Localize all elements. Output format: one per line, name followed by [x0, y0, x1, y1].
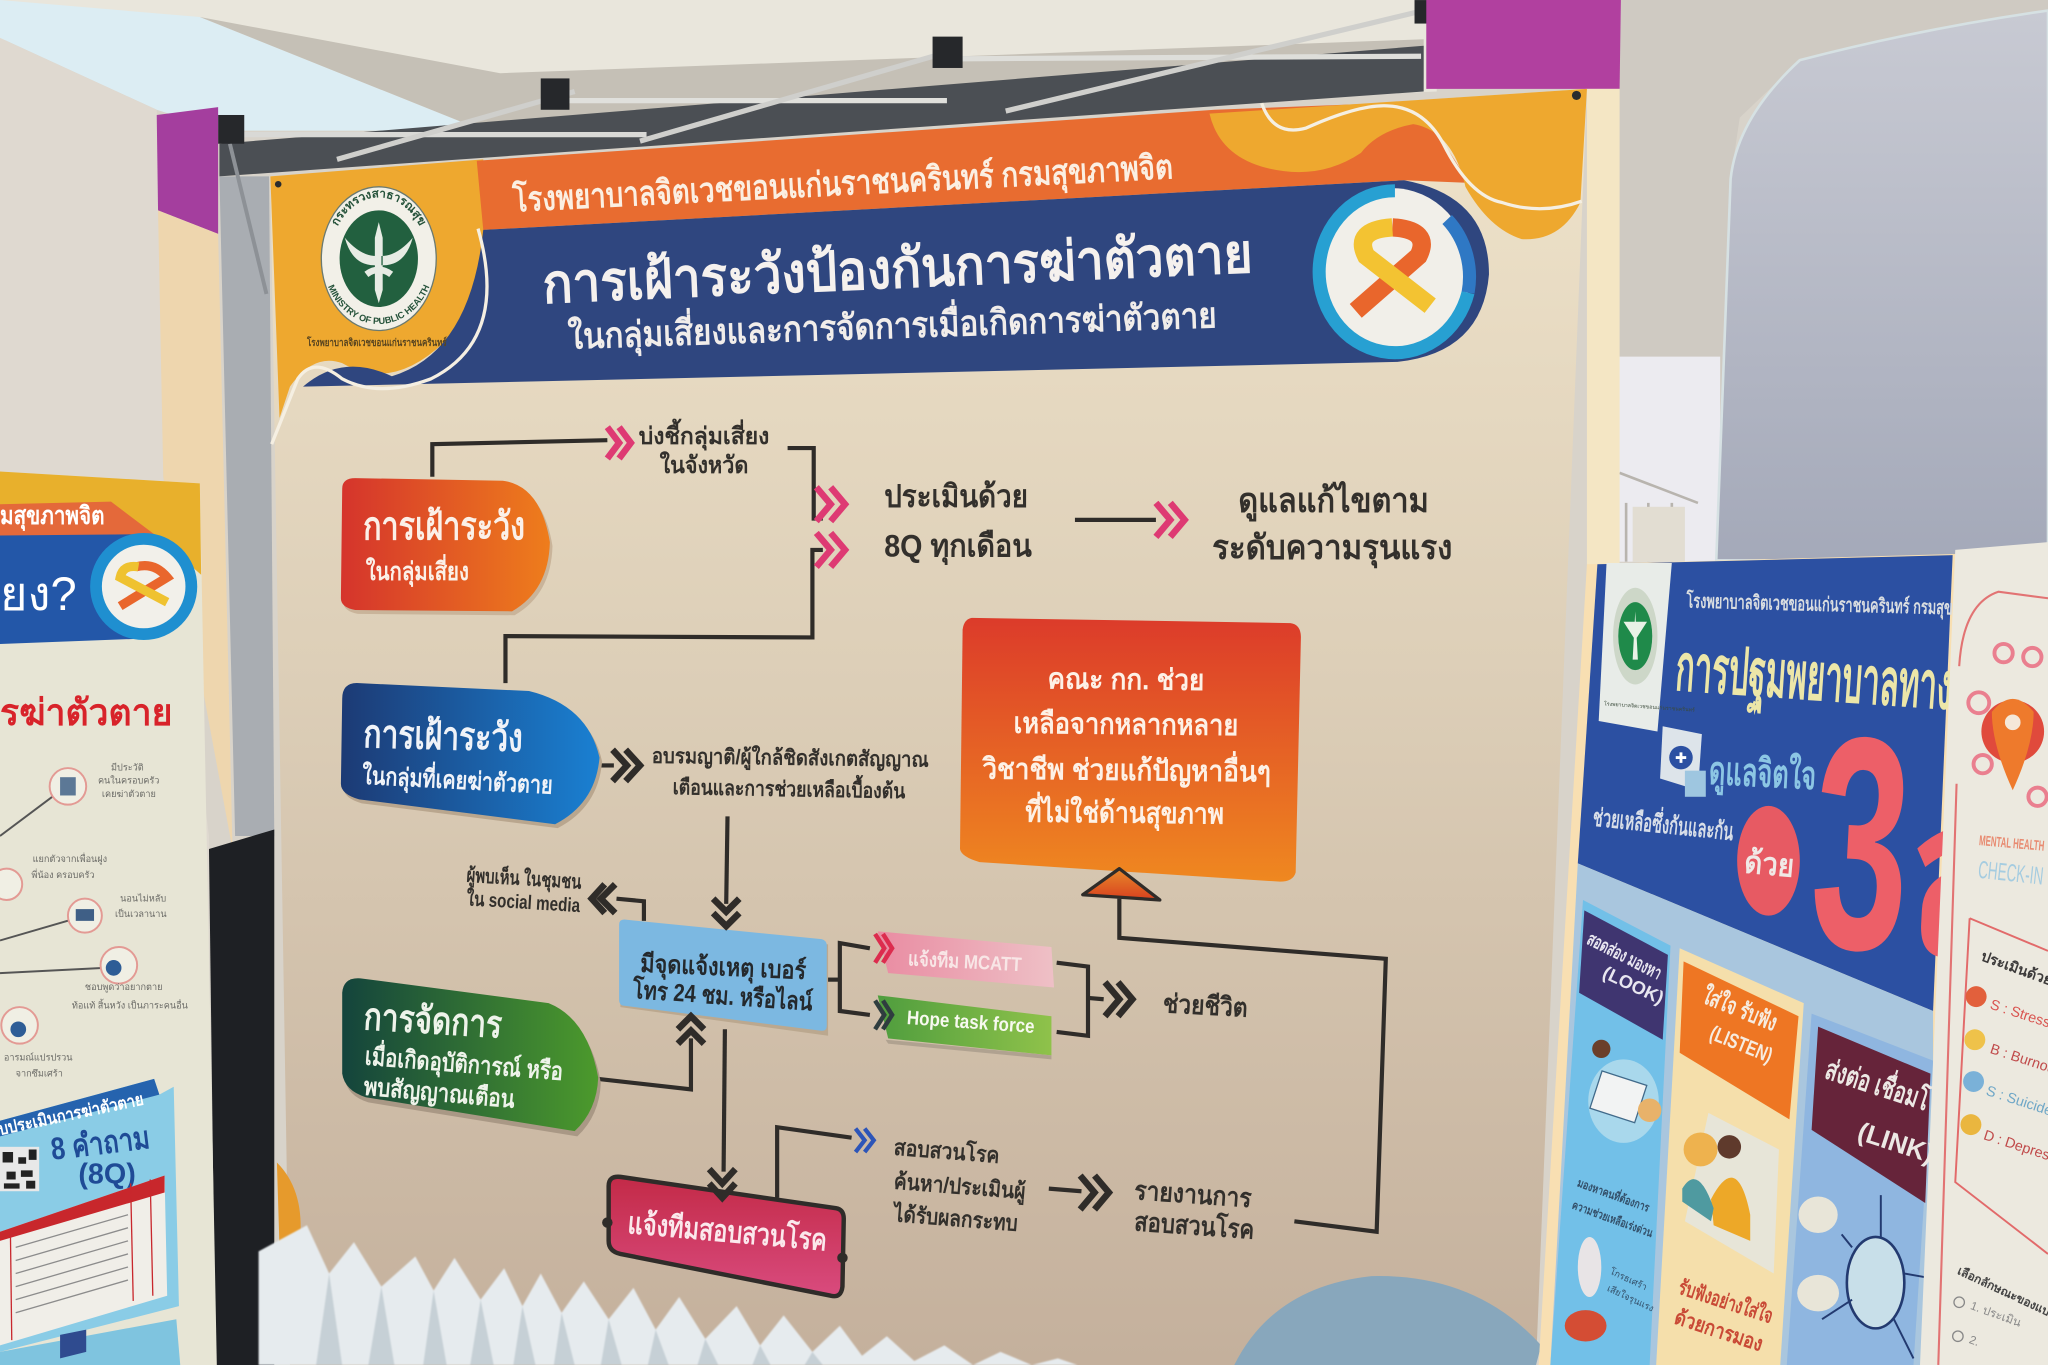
left poster ribbon badge: [90, 533, 197, 640]
left poster: ยง?: [0, 567, 77, 620]
text: investigate steps: สอบสวนโรค: [893, 1134, 1001, 1168]
arrow: pink to severity care: [1156, 503, 1185, 537]
text: care by severity: ดูแลแก้ไขตาม: [1238, 481, 1429, 522]
box: notify investigation team: แจ้งทีมสอบสวนโรค: [626, 1204, 829, 1257]
column: listen: รับฟังอย่างใส่ใจ: [1676, 1274, 1776, 1328]
arrow: mcatt: [875, 934, 892, 963]
text: community witnesses: ใน social media: [466, 887, 582, 917]
flowchart labels: [466, 418, 1452, 1245]
box: surveillance prior attempt: [341, 683, 602, 828]
box: management on incident: [342, 978, 601, 1136]
text: assess with 8Q: 8Q ทุกเดือน: [884, 528, 1032, 565]
text: investigation report: [1133, 1175, 1255, 1245]
check-in red frame: [1938, 592, 2048, 1365]
arrow: dark to training: [613, 750, 640, 781]
frame and truss: [218, 0, 1430, 836]
text: identify risk group: ในจังหวัด: [660, 451, 748, 478]
box: hotline: โทร 24 ชม. หรือไลน์: [631, 974, 814, 1017]
column: listen: [1656, 948, 1804, 1365]
icon: ministry of public health seal: กระทรวงสาธารณสุข: [332, 190, 426, 226]
box: hotline: มีจุดแจ้งเหตุ เบอร์: [640, 949, 807, 987]
left poster small captions: นอนไม่หลับ: [120, 893, 166, 903]
text: training relatives: เตือนและการช่วยเหลือเบื้องต้น: [673, 771, 906, 803]
magenta and cream side panels: [157, 0, 1621, 1365]
column: look: มองหาคนที่ต้องการ: [1575, 1174, 1653, 1215]
text: care by severity: ระดับความรุนแรง: [1212, 529, 1452, 569]
column: look: [1550, 900, 1671, 1365]
box: management on incident: พบสัญญาณเตือน: [363, 1073, 516, 1114]
arrow: to report: [1080, 1176, 1109, 1210]
box: surveillance risk group: การเฝ้าระวัง: [363, 505, 525, 548]
right poster: [1539, 554, 2048, 1365]
icon: ministry of public health seal: MINISTRY OF PUBLIC HEALTH: [328, 284, 430, 324]
box: surveillance prior attempt: การเฝ้าระวัง: [363, 713, 523, 760]
text: training relatives: อบรมญาติ/ผู้ใกล้ชิดสังเกตสัญญาณ: [652, 743, 929, 774]
left poster small captions: คนในครอบครัว: [98, 776, 159, 786]
text: save lives: ช่วยชีวิต: [1162, 988, 1248, 1023]
right poster first-aid icon: [1660, 726, 1706, 797]
box: committee help: วิชาชีพ ช่วยแก้ปัญหาอื่นๆ: [981, 747, 1271, 790]
arrow: pink into 8Q lower: [816, 533, 845, 567]
left poster small captions: อารมณ์แปรปรวน: [4, 1052, 73, 1063]
text: assess with 8Q: [884, 479, 1032, 565]
column: look: สอดส่อง มองหา: [1584, 928, 1666, 983]
box: committee help: ที่ไม่ใช่ด้านสุขภาพ: [1025, 791, 1224, 832]
column: link: (LINK): [1854, 1116, 1938, 1169]
header yellow left block: [270, 159, 487, 418]
column: link: [1787, 1014, 1938, 1365]
banner lower-left yellow remnant: [277, 1162, 301, 1247]
box: management on incident: การจัดการ: [363, 996, 504, 1047]
right poster big letter: ส: [1901, 751, 2048, 1006]
header navy band: [303, 180, 1489, 387]
left poster small captions: ท้อแท้ สิ้นหวัง เป็นภาระคนอื่น: [72, 997, 188, 1010]
text: investigate steps: [890, 1134, 1026, 1236]
text: identify risk group: [639, 418, 769, 478]
banner header: [270, 88, 1587, 444]
left poster small captions: แยกตัวจากเพื่อนฝูง: [33, 852, 107, 865]
right poster mind care text: ดูแลจิตใจ: [1708, 748, 1817, 800]
left poster 8Q panel: บประเมินการฆ่าตัวตาย: [0, 1090, 145, 1139]
left poster small captions: จากซึมเศร้า: [16, 1068, 63, 1078]
left poster 8Q panel: (8Q): [78, 1158, 136, 1190]
left poster risk icons: [0, 768, 137, 1044]
text: investigation report: รายงานการ: [1133, 1175, 1253, 1213]
white pleated table cloth: [259, 1225, 1078, 1365]
column: listen: ด้วยการมอง: [1672, 1305, 1766, 1356]
box: surveillance risk group: ในกลุ่มเสี่ยง: [366, 554, 469, 588]
column: listen: (LISTEN): [1707, 1022, 1776, 1068]
arrow: pink into 8Q upper: [816, 487, 845, 521]
header orange strip: [477, 102, 1469, 230]
column: look: ความช่วยเหลือเร่งด่วน: [1570, 1198, 1655, 1240]
arrow: to save life: [1105, 982, 1132, 1016]
text: community witnesses: [466, 863, 583, 917]
text: training relatives: [652, 743, 929, 803]
icon: triangle pointing to committee: [1083, 869, 1160, 900]
text: identify risk group: บ่งชี้กลุ่มเสี่ยง: [639, 418, 769, 451]
white check-in poster: [1920, 542, 2048, 1365]
icon: ribbon badge: [1314, 188, 1471, 355]
arrow: down to investigation: [709, 1169, 735, 1198]
box: committee help: คณะ กก. ช่วย: [1047, 663, 1204, 697]
header white swoosh lines: [272, 103, 1582, 444]
check-in choices: 2.: [1967, 1333, 1981, 1349]
left poster: [0, 472, 217, 1365]
banner blue corner circle: [1234, 1276, 1541, 1365]
main title: การเฝ้าระวังป้องกันการฆ่าตัวตาย: [541, 222, 1254, 315]
arrow: pink to risk list: [607, 427, 631, 458]
box: committee help: [960, 618, 1301, 882]
column: look: โกรธเศร้า: [1608, 1266, 1649, 1292]
box: hope task force: Hope task force: [906, 1007, 1035, 1038]
box: surveillance prior attempt: ในกลุ่มที่เคยฆ่าตัวตาย: [361, 758, 554, 802]
left poster header text: มสุขภาพจิต: [0, 503, 104, 532]
text: investigate steps: ได้รับผลกระทบ: [890, 1200, 1019, 1236]
box: notify MCATT: แจ้งทีม MCATT: [907, 947, 1022, 976]
right poster red circle with text: [1737, 806, 1800, 916]
logo caption: โรงพยาบาลจิตเวชขอนแก่นราชนครินทร์: [306, 336, 447, 349]
left poster 8Q panel: [0, 1079, 180, 1365]
left poster 8Q panel: 8 คำถาม: [49, 1120, 152, 1167]
right poster support text: ช่วยเหลือซึ่งกันและกัน: [1592, 800, 1735, 846]
text: care by severity: [1212, 481, 1452, 569]
subtitle: ในกลุ่มเสี่ยงและการจัดการเมื่อเกิดการฆ่าตัวตาย: [567, 290, 1217, 359]
column: listen: ใส่ใจ รับฟัง: [1699, 981, 1781, 1036]
box: notify MCATT: [878, 931, 1054, 987]
left poster small captions: มีประวัติ: [111, 763, 144, 773]
column: look: (LOOK): [1600, 962, 1667, 1008]
main banner cloth: [270, 89, 1587, 1365]
left poster red heading: รฆ่าตัวตาย: [0, 692, 172, 733]
left poster small captions: [4, 763, 188, 1078]
hospital name: โรงพยาบาลจิตเวชขอนแก่นราชนครินทร์ กรมสุขภาพจิต: [511, 146, 1174, 222]
left poster small captions: เคยฆ่าตัวตาย: [102, 789, 156, 799]
column: link: ส่งต่อ เชื่อมโ: [1821, 1048, 1935, 1117]
box: management on incident: เมื่อเกิดอุบัติการณ์ หรือ: [364, 1039, 564, 1088]
right poster logo card: [1599, 563, 1695, 731]
chevrons: [592, 427, 1185, 1210]
right poster red circle with text: ด้วย: [1743, 845, 1796, 884]
text: assess with 8Q: ประเมินด้วย: [884, 479, 1028, 514]
right poster big 3: 3: [1804, 673, 1918, 1016]
text: investigation report: สอบสวนโรค: [1133, 1205, 1255, 1245]
text: investigate steps: ค้นหา/ประเมินผู้: [893, 1169, 1026, 1206]
banner grommets: [275, 91, 1581, 187]
header yellow right wave: [1209, 89, 1587, 239]
arrow: down to hotline: [713, 899, 739, 926]
icon: ministry of public health seal: [320, 186, 437, 332]
box: hope task force: [878, 995, 1051, 1059]
box: committee help: เหลือจากหลากหลาย: [1013, 708, 1238, 742]
left poster small captions: ชอบพูดว่าอยากตาย: [85, 982, 162, 993]
box: surveillance risk group: [341, 478, 552, 615]
left poster small captions: เป็นเวลานาน: [115, 907, 167, 919]
arrow: up to hotline: [678, 1016, 704, 1044]
column: look: เสียใจรุนแรง: [1605, 1283, 1655, 1314]
flowchart connectors: [432, 440, 1386, 1232]
right poster logo card: โรงพยาบาลจิตเวชขอนแก่นราชนครินทร์: [1604, 700, 1695, 714]
box: hotline: [619, 920, 828, 1036]
arrow: left to witness: [592, 884, 615, 913]
check-in choices: 1. ประเมิน: [1969, 1299, 2023, 1330]
box: notify investigation team: [602, 1177, 848, 1296]
arrow: blue to investigate: [856, 1129, 874, 1152]
check-in gear icon: [1968, 644, 2047, 806]
text: community witnesses: ผู้พบเห็น ในชุมชน: [466, 863, 583, 896]
left poster small captions: พี่น้อง ครอบครัว: [31, 868, 94, 880]
check-in SBSD box: [1955, 918, 2048, 1254]
arrow: hope: [875, 1001, 892, 1029]
